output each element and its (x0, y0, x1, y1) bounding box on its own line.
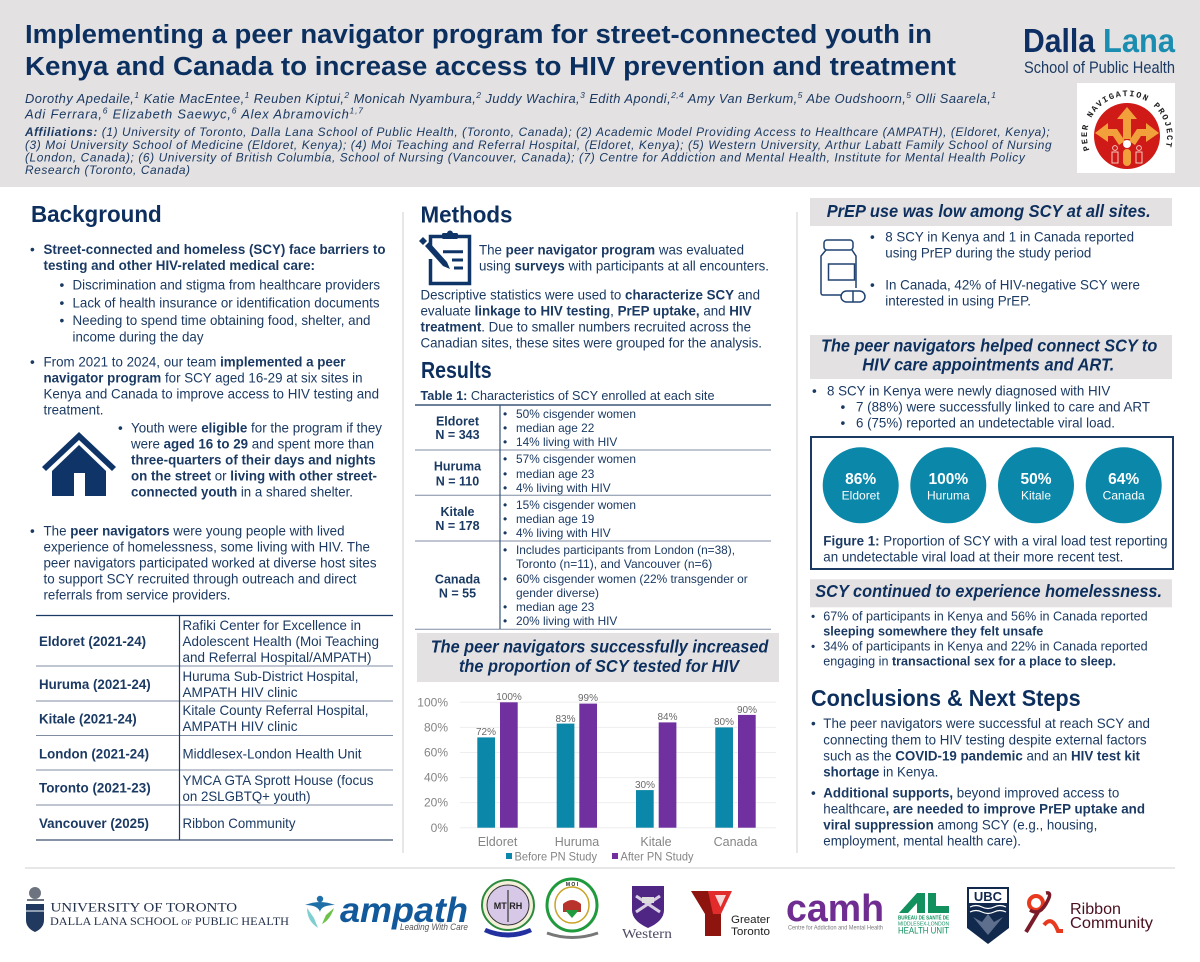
peer navigators text (30, 523, 377, 602)
peer navigators text: • (30, 523, 35, 538)
eligibility text: • (118, 420, 123, 435)
conclusions text: viral suppression among SCY (e.g., housing, (823, 817, 1097, 832)
figure 1: Eldoret (842, 488, 880, 502)
barriers list: Street-connected and homeless (SCY) face barriers to (44, 242, 386, 257)
logo: Dalla Lana: Dalla (1023, 22, 1096, 59)
PrEP text (870, 229, 1140, 308)
table: sites: London (2021-24) (39, 746, 149, 761)
peer navigators text: The peer navigators were young people with lived (44, 523, 344, 538)
table: sites: Ribbon Community (182, 816, 296, 831)
logo: AMPATH: ampath (340, 891, 468, 930)
table 1: 4% living with HIV (516, 481, 611, 495)
table 1: • (503, 452, 507, 466)
methods text: evaluate linkage to HIV testing, PrEP uptake, and HIV (420, 303, 752, 318)
callout: HIV care: HIV care appointments and ART. (862, 354, 1114, 374)
table 1: N = 110 (436, 474, 479, 488)
callout: HIV care: The peer navigators helped connect SCY to (821, 336, 1158, 356)
program description: From 2021 to 2024, our team implemented a peer (44, 354, 346, 369)
table 1: N = 343 (435, 428, 480, 442)
panel: results (415, 357, 779, 864)
authors: Adi Ferrara,6 Elizabeth Saewyc,6 Alex Abramovich1,7 (24, 106, 363, 122)
table 1: • (503, 498, 507, 512)
conclusions text: employment, mental health care). (823, 833, 1021, 848)
table: sites: Huruma (2021-24) (39, 677, 151, 692)
logo: University of Toronto: UNIVERSITY OF TORONTO (50, 900, 237, 914)
callout: PrEP: PrEP use was low among SCY at all sites. (827, 201, 1151, 221)
HIV care text: • (812, 383, 817, 398)
bar chart: tested for HIV: 100% (496, 692, 522, 703)
table 1: • (503, 543, 507, 557)
figure 1: 86% (845, 471, 876, 488)
barriers list: testing and other HIV-related medical care: (44, 258, 315, 273)
logo: Dalla Lana: School of Public Health (1024, 59, 1175, 77)
PrEP text: 8 SCY in Kenya and 1 in Canada reported (885, 229, 1134, 244)
bar chart: tested for HIV: 0% (431, 821, 448, 835)
peer navigators text: peer navigators participated worked at diverse host sites (44, 555, 377, 570)
callout: homelessness (810, 579, 1172, 607)
heading: results: Results (421, 357, 492, 383)
table 1: 15% cisgender women (516, 498, 636, 512)
barriers list: Lack of health insurance or identification documents (72, 295, 380, 310)
table 1: 50% cisgender women (516, 407, 636, 421)
table: sites: YMCA GTA Sprott House (focus (182, 773, 374, 788)
barriers list: • (60, 313, 64, 328)
HIV care text: • (840, 415, 846, 430)
figure 1: Figure 1: Proportion of SCY with a viral load test reporting (823, 533, 1168, 548)
HIV care text: 7 (88%) were successfully linked to care and ART (856, 399, 1150, 414)
table 1: 60% cisgender women (22% transgender or (516, 572, 748, 586)
affiliations: Affiliations: (1) University of Toronto, Dalla Lana School of Public Health, (Toronto, Canada); (2) Academic Model Providing Access to Healthcare (AMPATH), (Eldoret, Kenya); (24, 125, 1050, 139)
logo: Moi University seal (547, 879, 598, 938)
peer navigators text: referrals from service providers. (44, 587, 230, 602)
logo: Western (622, 886, 672, 942)
conclusions text: Additional supports, beyond improved access to (823, 785, 1119, 800)
table 1: Huruma (434, 460, 482, 474)
logo: CAMH: camh (786, 888, 884, 930)
logo: UBC: UBC (974, 889, 1003, 904)
homelessness text: 34% of participants in Kenya and 22% in Canada reported (823, 638, 1148, 654)
logo: Ribbon Community (1026, 893, 1153, 932)
table 1: • (503, 512, 507, 526)
bar chart: tested for HIV (417, 692, 776, 864)
logo: AMPATH: Leading With Care (400, 922, 468, 932)
callout: HIV testing: the proportion of SCY tested for HIV (459, 656, 740, 676)
eligibility text: were aged 16 to 29 and spent more than (130, 436, 374, 451)
methods text (420, 242, 769, 350)
barriers list: • (60, 295, 64, 310)
bar chart: tested for HIV: Huruma (555, 835, 599, 849)
conclusions text: connecting them to HIV testing despite external factors (823, 732, 1147, 747)
table 1: 57% cisgender women (516, 452, 636, 466)
table 1: N = 55 (439, 586, 476, 600)
bar chart: tested for HIV: 72% (476, 727, 496, 738)
logo: UBC (967, 887, 1009, 944)
methods text: The peer navigator program was evaluated (479, 242, 744, 257)
table: sites: Kitale (2021-24) (39, 711, 137, 726)
program description (30, 354, 379, 417)
peer navigators text: experience of homelessness, some living with HIV. The (44, 539, 370, 554)
callout: HIV testing (417, 633, 779, 682)
panel: methods (419, 202, 769, 350)
homelessness text: engaging in transactional sex for a place to sleep. (823, 654, 1116, 668)
table 1: median age 23 (516, 600, 595, 614)
table: sites: AMPATH HIV clinic (182, 685, 298, 700)
table: sites: on 2SLGBTQ+ youth) (182, 789, 310, 804)
barriers list: • (30, 242, 35, 257)
methods text: using surveys with participants at all encounters. (479, 258, 769, 273)
bar chart: tested for HIV: 40% (424, 770, 448, 784)
logo: Dalla Lana: Lana (1103, 22, 1176, 59)
panel: PrEP use (810, 198, 1172, 308)
table: sites: Toronto (2021-23) (39, 781, 151, 796)
bar chart: tested for HIV: Eldoret (478, 835, 518, 849)
HIV care text: 8 SCY in Kenya were newly diagnosed with HIV (827, 383, 1110, 398)
eligibility text: Youth were eligible for the program if they (131, 420, 382, 435)
table 1: 20% living with HIV (516, 614, 617, 628)
barriers list: • (60, 277, 64, 292)
logo: YMCA Greater Toronto (691, 891, 770, 938)
logo: MTRH seal (482, 880, 534, 938)
bar chart: tested for HIV: Canada (714, 835, 757, 849)
table 1: • (503, 600, 507, 614)
figure 1: 100% (928, 471, 968, 488)
table: sites: Middlesex-London Health Unit (182, 746, 362, 761)
logo: YMCA Greater Toronto: Toronto (731, 926, 770, 938)
HIV care text: • (840, 399, 846, 414)
header band (0, 0, 1200, 187)
affiliations: (London, Canada); (6) University of British Columbia, School of Nursing (Vancouver, Canada); (7) Centre for Addiction and Mental Health, Institute for Mental Health Policy (25, 150, 1026, 164)
bar chart: tested for HIV: 80% (714, 717, 734, 728)
callout: HIV testing: The peer navigators successfully increased (431, 636, 769, 656)
figure 1: an undetectable viral load at their more recent test. (823, 549, 1123, 564)
PrEP text: interested in using PrEP. (885, 293, 1031, 308)
PrEP text: In Canada, 42% of HIV-negative SCY were (885, 277, 1140, 292)
table 1: Eldoret (436, 414, 480, 428)
table: sites (36, 615, 393, 840)
table 1: median age 19 (516, 512, 595, 526)
title: Kenya and Canada to increase access to HIV prevention and treatment (25, 53, 957, 81)
program description: Kenya and Canada to improve access to HIV testing and (44, 386, 379, 401)
authors: Dorothy Apedaile,1 Katie MacEntee,1 Reuben Kiptui,2 Monicah Nyambura,2 Juddy Wachira,3 Edith Apondi,2,4 Amy Van Berkum,5 Abe Oudshoorn,5 Olli Saarela,1 (25, 90, 996, 106)
PrEP text: using PrEP during the study period (885, 245, 1091, 260)
icon: house (42, 432, 116, 496)
table 1: Canada (435, 572, 481, 586)
logo: Western: Western (622, 927, 672, 942)
table 1: gender diverse) (516, 586, 599, 600)
table 1: • (503, 421, 507, 435)
conclusions text: • (811, 716, 816, 731)
table: sites: AMPATH HIV clinic (182, 719, 298, 734)
bar chart: tested for HIV: 80% (424, 720, 448, 734)
table: sites: Huruma Sub-District Hospital, (182, 669, 358, 684)
callout: homelessness: SCY continued to experience homelessness. (815, 581, 1162, 601)
bar chart: tested for HIV: 99% (578, 693, 598, 704)
footer logos (26, 879, 1153, 944)
barriers list: income during the day (72, 329, 204, 344)
bar chart: tested for HIV: 84% (657, 712, 678, 723)
table 1: • (503, 467, 507, 481)
table: sites: Kitale County Referral Hospital, (182, 703, 368, 718)
table: sites: Adolescent Health (Moi Teaching (182, 634, 379, 649)
homelessness text: sleeping somewhere they felt unsafe (823, 624, 1043, 638)
table: sites: Eldoret (2021-24) (39, 634, 146, 649)
homelessness text: 67% of participants in Kenya and 56% in Canada reported (823, 608, 1148, 624)
table 1: N = 178 (435, 519, 480, 533)
logo: peer navigation project (1077, 83, 1175, 173)
logo: Middlesex-London Health Unit: MIDDLESEX-LONDON (898, 922, 949, 928)
authors (24, 90, 996, 122)
table 1: • (503, 614, 507, 628)
bar chart: tested for HIV: 83% (555, 714, 576, 725)
table 1: Toronto (n=11), and Vancouver (n=6) (516, 557, 712, 571)
program description: treatment. (44, 402, 104, 417)
table 1: 4% living with HIV (516, 526, 611, 540)
eligibility text: connected youth in a shared shelter. (131, 484, 353, 499)
panel: homelessness (810, 579, 1172, 668)
title: Implementing a peer navigator program for street-connected youth in (25, 21, 932, 49)
conclusions text: such as the COVID-19 pandemic and an HIV test kit (823, 748, 1140, 763)
bar chart: tested for HIV: 30% (635, 780, 655, 791)
affiliations: (3) Moi University School of Medicine (Eldoret, Kenya); (4) Moi Teaching and Referral Hospital, (Eldoret, Kenya); (5) Western University, Arthur Labatt Family School of Nursing (25, 138, 1052, 152)
logo: Ribbon Community: Community (1070, 915, 1153, 932)
title (25, 21, 957, 81)
panel: conclusions (811, 685, 1150, 848)
conclusions text: healthcare, are needed to improve PrEP uptake and (823, 801, 1145, 816)
table 1: • (503, 572, 507, 586)
eligibility text: three-quarters of their days and nights (131, 452, 376, 467)
logo: CAMH: Centre for Addiction and Mental Health (788, 926, 883, 932)
figure 1: 50% (1020, 471, 1052, 488)
callout: HIV care (810, 335, 1172, 379)
bar chart: tested for HIV: Kitale (640, 835, 672, 849)
figure 1: Huruma (927, 488, 970, 502)
peer navigators text: to support SCY recruited through outreach and direct (44, 571, 357, 586)
panel: HIV care (810, 335, 1173, 569)
table 1: median age 22 (516, 421, 595, 435)
table 1: 14% living with HIV (516, 435, 617, 449)
table: sites: Rafiki Center for Excellence in (182, 618, 361, 633)
legend: Before PN Study (514, 850, 597, 864)
methods text: Descriptive statistics were used to characterize SCY and (420, 287, 760, 302)
eligibility text (118, 420, 382, 499)
eligibility text: on the street or living with other street- (131, 468, 377, 483)
table 1: • (503, 526, 507, 540)
figure 1 (811, 437, 1173, 569)
table 1 (415, 405, 771, 629)
conclusions text: shortage in Kenya. (823, 764, 938, 779)
homelessness text (811, 608, 1148, 668)
icon: clipboard (419, 230, 470, 284)
conclusions text: • (811, 785, 816, 800)
figure 1: Canada (1103, 488, 1145, 502)
bar chart: tested for HIV: 20% (424, 796, 448, 810)
logo: Middlesex-London Health Unit: HEALTH UNIT (898, 926, 949, 936)
conclusions text (811, 716, 1150, 848)
conclusions text: The peer navigators were successful at reach SCY and (823, 716, 1150, 731)
legend (506, 850, 694, 864)
PrEP text: • (870, 229, 875, 244)
callout: PrEP (810, 198, 1172, 226)
table: sites: Vancouver (2025) (39, 816, 149, 831)
logo: University of Toronto: DALLA LANA SCHOOL OF PUBLIC HEALTH (50, 914, 289, 928)
table 1: Includes participants from London (n=38), (516, 543, 735, 557)
figure 1: Kitale (1021, 488, 1051, 502)
barriers list: Discrimination and stigma from healthcare providers (72, 277, 380, 292)
logo: University of Toronto (26, 887, 289, 932)
affiliations (24, 125, 1052, 177)
table 1: • (503, 481, 507, 495)
methods text: treatment. Due to smaller numbers recruited across the (420, 319, 751, 334)
homelessness text: • (811, 640, 815, 654)
program description: • (30, 354, 35, 369)
logo: Ribbon Community: Ribbon (1070, 901, 1121, 918)
bar chart: tested for HIV: 100% (417, 696, 448, 710)
table 1: • (503, 435, 507, 449)
program description: navigator program for SCY aged 16-29 at six sites in (44, 370, 362, 385)
bar chart: tested for HIV: 90% (737, 705, 757, 716)
logo: peer navigation project: PEER NAVIGATION PROJECT (1081, 90, 1173, 152)
affiliations: Research (Toronto, Canada) (25, 163, 190, 177)
bar chart: tested for HIV: 60% (424, 746, 448, 760)
logo: Moi University seal: M O I (566, 882, 579, 888)
logo: YMCA Greater Toronto: Greater (731, 914, 770, 926)
table 1: • (503, 407, 507, 421)
table: sites: and Referral Hospital/AMPATH) (182, 650, 372, 665)
homelessness text: • (811, 610, 815, 624)
logo: Dalla Lana (1023, 22, 1176, 77)
legend: After PN Study (620, 850, 694, 864)
figure 1: 64% (1108, 471, 1139, 488)
heading: methods: Methods (420, 202, 512, 228)
table 1 caption: Table 1: Characteristics of SCY enrolled at each site (420, 388, 714, 403)
panel: background (30, 201, 393, 840)
HIV care text: 6 (75%) reported an undetectable viral load. (856, 415, 1115, 430)
methods text: Canadian sites, these sites were grouped for the analysis. (420, 335, 762, 350)
logo: MTRH seal: MT RH (494, 901, 522, 911)
barriers list (30, 242, 386, 344)
heading: conclusions: Conclusions & Next Steps (811, 685, 1081, 711)
logo: Middlesex-London Health Unit (898, 893, 949, 936)
logo: Middlesex-London Health Unit: BUREAU DE SANTÉ DE (898, 914, 949, 922)
icon: pill bottle (821, 240, 865, 302)
heading: background: Background (31, 201, 162, 227)
table 1: median age 23 (516, 467, 595, 481)
PrEP text: • (870, 277, 875, 292)
barriers list: Needing to spend time obtaining food, shelter, and (72, 313, 370, 328)
table 1: Kitale (440, 505, 475, 519)
HIV care text (812, 383, 1150, 430)
